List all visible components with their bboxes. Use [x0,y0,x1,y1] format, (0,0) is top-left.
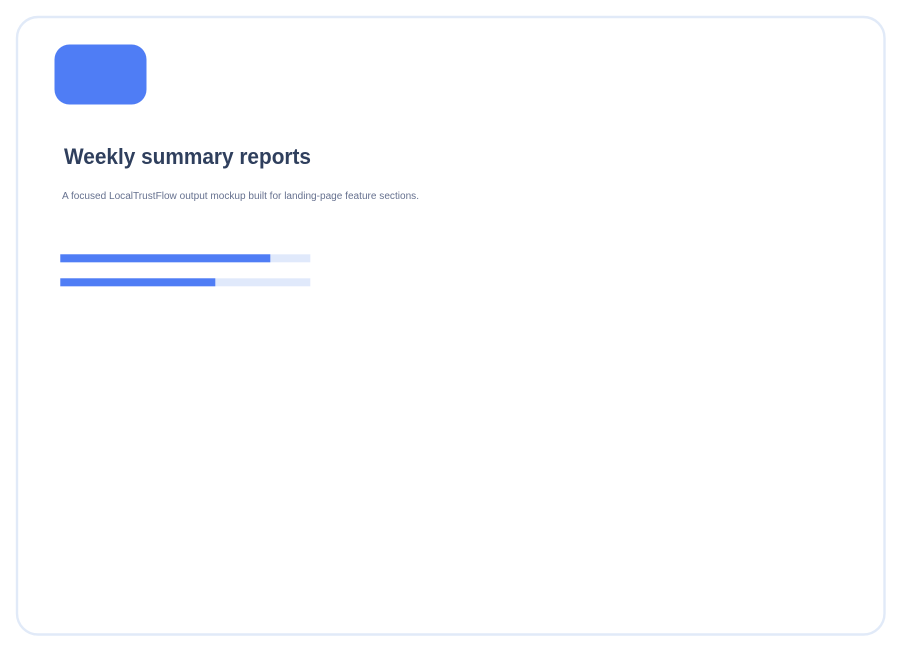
icon: logo placeholder [54,44,146,104]
heading: title: Weekly summary reports [64,144,311,169]
chart: progress bar one [60,254,310,262]
text block: description: A focused LocalTrustFlow output mockup built for landing-page feature sections. [62,191,419,202]
chart: progress bar two [60,278,310,286]
